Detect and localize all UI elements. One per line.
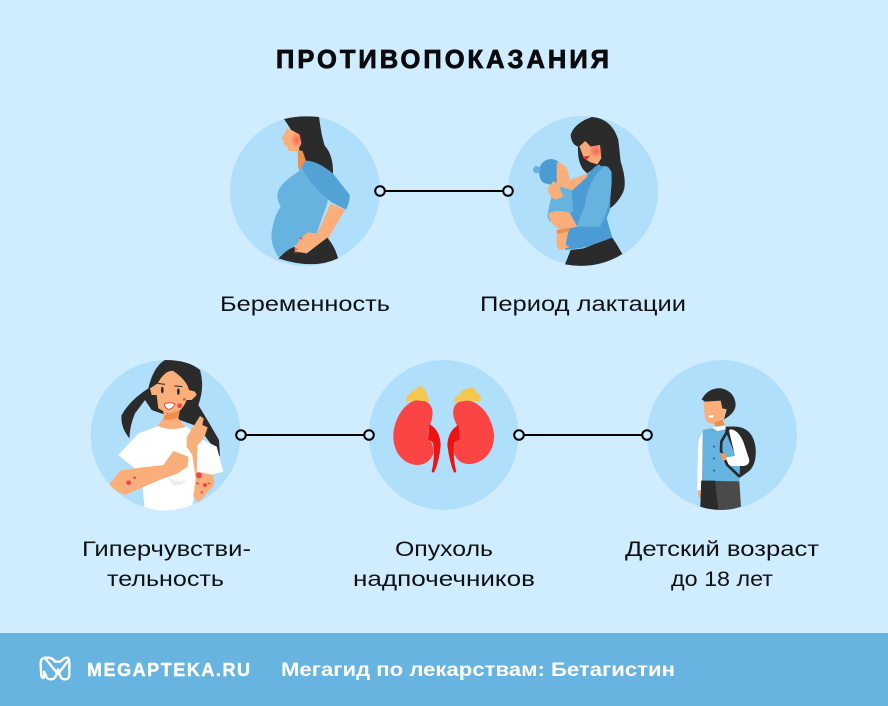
footer guide title: Мегагид по лекарствам: Бетагистин <box>281 660 675 681</box>
connector: tumor to child <box>514 430 652 440</box>
label: lactation period: Период лактации <box>480 293 686 316</box>
connector: hypersensitivity to tumor <box>236 430 374 440</box>
icon: megapteka logo <box>41 658 69 679</box>
label: hypersensitivity: Гиперчувстви- <box>82 538 251 561</box>
title: ПРОТИВОПОКАЗАНИЯ <box>276 46 609 74</box>
label: hypersensitivity <box>82 538 251 591</box>
connector: pregnancy to lactation <box>375 186 513 196</box>
label: childhood under 18: до 18 лет <box>671 568 773 591</box>
icon: schoolboy with backpack <box>647 360 797 510</box>
label: hypersensitivity: тельность <box>107 568 224 591</box>
brand name: MEGAPTEKA.RU <box>87 660 250 680</box>
label: childhood under 18: Детский возраст <box>625 538 819 561</box>
label: adrenal tumor <box>353 538 535 591</box>
icon: pregnant woman <box>230 116 380 266</box>
footer band <box>0 633 888 706</box>
icon: woman with skin rash <box>91 360 241 510</box>
label: adrenal tumor: Опухоль <box>395 538 493 561</box>
label: adrenal tumor: надпочечников <box>353 568 535 591</box>
label: childhood under 18 <box>625 538 819 591</box>
icon: nursing mother with baby <box>508 116 658 266</box>
label: pregnancy: Беременность <box>220 293 390 316</box>
icon: kidneys with adrenal tumors <box>369 360 519 510</box>
